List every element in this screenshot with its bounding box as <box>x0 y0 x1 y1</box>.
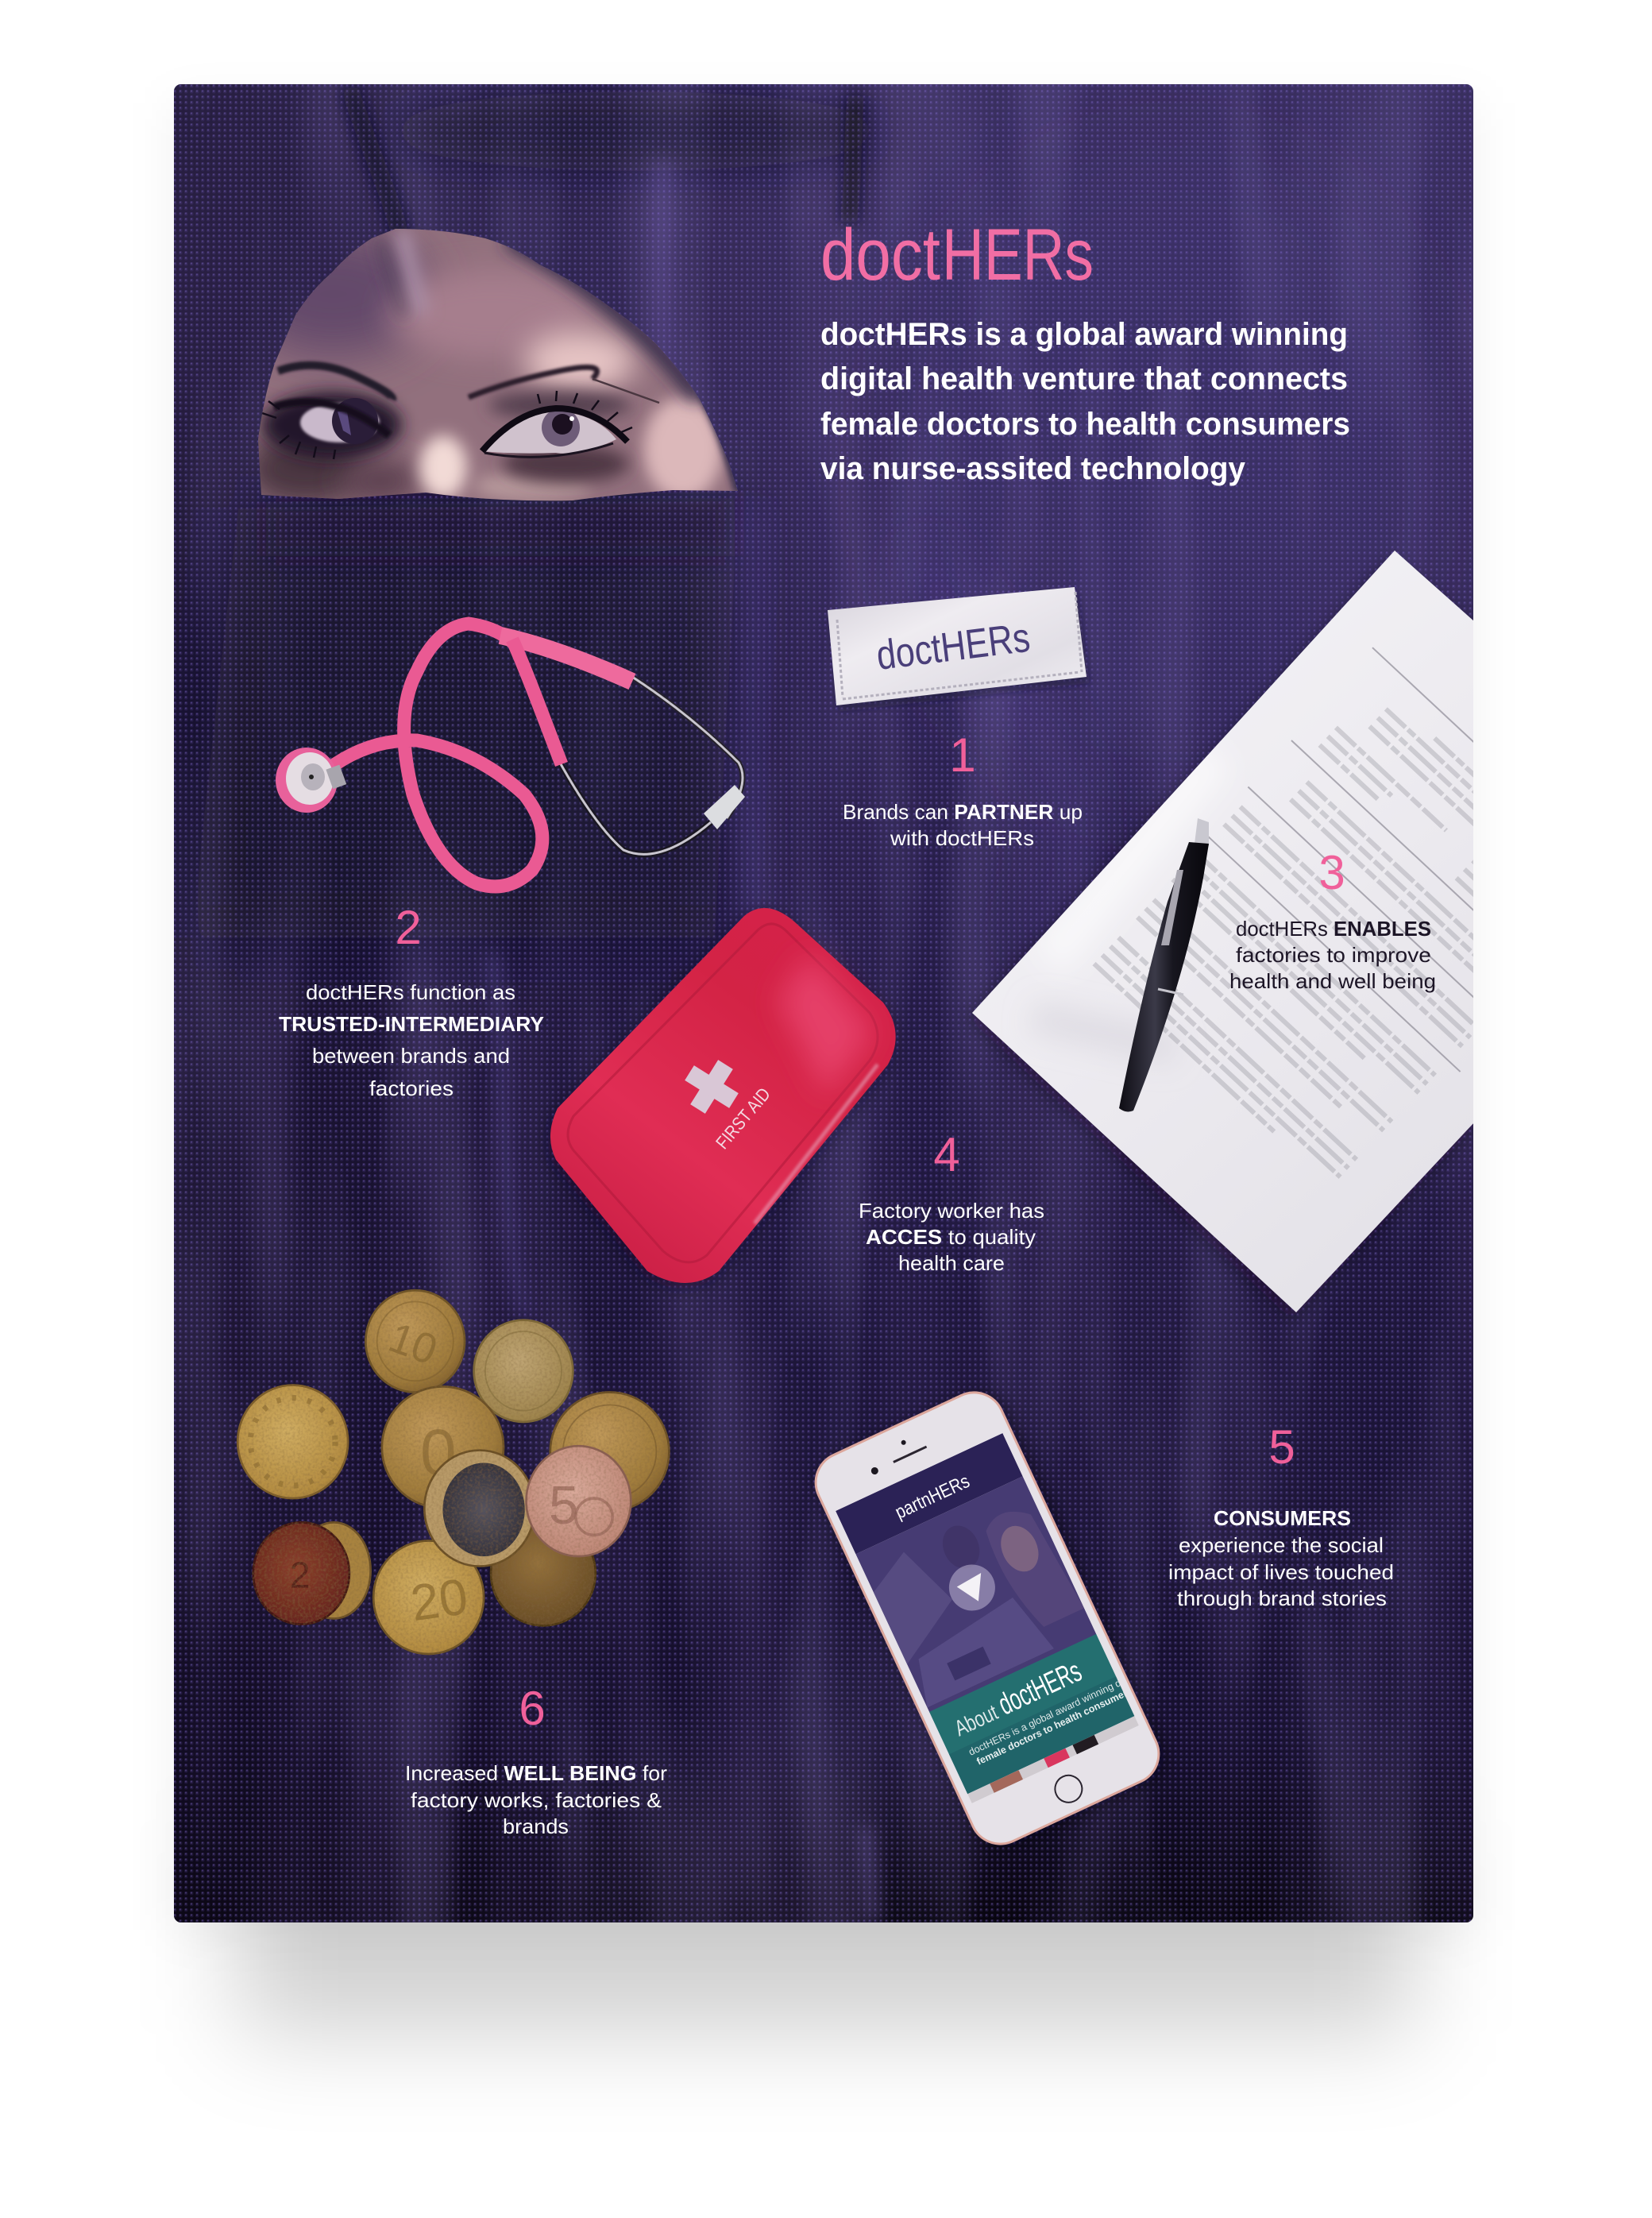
poster drop shadow <box>174 103 1473 2034</box>
intro text <box>820 317 1350 486</box>
step 6 <box>405 1682 667 1838</box>
chest piece <box>276 748 346 813</box>
step 2 <box>279 901 544 1100</box>
right eye <box>469 367 659 483</box>
phone screen text: partnHERs <box>892 1470 973 1524</box>
coin: twenty: 20 <box>407 1567 471 1632</box>
coin: stacked red cents <box>253 1522 371 1625</box>
face in veil opening <box>258 229 738 500</box>
step 3 description <box>1229 917 1436 993</box>
step 3 <box>1229 846 1436 993</box>
coin: dark bottom <box>491 1521 596 1625</box>
play button <box>941 1557 1002 1618</box>
phone screen text: doctHERs is a global award winning digital health <box>967 1656 1168 1758</box>
step 1 <box>843 728 1083 850</box>
coin: large behind <box>550 1393 669 1511</box>
step 2 description: factories <box>369 1076 454 1100</box>
step 4 <box>859 1128 1044 1275</box>
intro text: digital health venture that connects <box>820 361 1348 396</box>
phone screen text: female doctors to health consumers via nurse <box>975 1666 1176 1768</box>
paper printed lines <box>1094 673 1603 1186</box>
step 2 description: doctHERs function as <box>306 980 515 1004</box>
step 6 description: factory works, factories & <box>411 1788 662 1812</box>
coin: centre: 0 <box>420 1416 457 1489</box>
step 1 description: Brands can PARTNER up <box>843 800 1083 824</box>
paper document <box>953 540 1631 1327</box>
step 5 description: impact of lives touched <box>1168 1560 1394 1584</box>
intro text: doctHERs is a global award winning <box>820 317 1348 352</box>
phone screen text: doctHERs <box>994 1655 1087 1721</box>
coin: centre <box>382 1386 504 1509</box>
step 3 description: doctHERs ENABLES <box>1236 917 1431 941</box>
coin: ten cents <box>365 1290 465 1393</box>
coin: five cents <box>527 1446 631 1556</box>
intro text: via nurse-assited technology <box>820 451 1246 486</box>
coins <box>237 1290 669 1654</box>
phone screen text <box>858 1426 1176 1770</box>
step 4 description: Factory worker has <box>859 1199 1044 1223</box>
home button <box>1051 1771 1087 1806</box>
number 1: 1 <box>949 728 976 782</box>
phone screen text: About <box>951 1700 1002 1741</box>
logo: doctHERs: doct <box>820 214 940 296</box>
panel: poster <box>166 84 1481 2075</box>
logo: doctHERs <box>820 214 1094 296</box>
stethoscope <box>276 624 745 887</box>
number 4: 4 <box>933 1128 960 1181</box>
step 6 description <box>405 1761 667 1838</box>
number 6: 6 <box>519 1682 546 1735</box>
number 5: 5 <box>1268 1420 1295 1474</box>
coin: five cents: 5 <box>549 1476 579 1536</box>
first aid kit <box>548 908 896 1289</box>
step 2 description <box>279 980 544 1100</box>
step 1 description <box>843 800 1083 850</box>
step 4 description <box>859 1199 1044 1275</box>
step 5 description: CONSUMERS <box>1214 1506 1351 1530</box>
coin: stacked red cents: 2 <box>290 1554 310 1595</box>
step 5 description: through brand stories <box>1177 1586 1387 1610</box>
step 3 description: factories to improve <box>1236 943 1431 967</box>
phone speaker and camera <box>865 1432 928 1475</box>
coin: ten cents: 10 <box>383 1314 443 1374</box>
phone screen <box>836 1410 1189 1803</box>
pen <box>1119 818 1209 1111</box>
step 5 description <box>1168 1506 1394 1610</box>
logo: doctHERs: HERs <box>942 214 1094 296</box>
number 3: 3 <box>1318 846 1345 899</box>
step 3 description: health and well being <box>1229 969 1436 993</box>
step 2 description: TRUSTED-INTERMEDIARY <box>279 1012 544 1036</box>
step 1 description: with doctHERs <box>890 826 1034 850</box>
fabric background <box>174 84 1473 1922</box>
step 4 description: health care <box>898 1251 1005 1275</box>
step 6 description: Increased WELL BEING for <box>405 1761 667 1785</box>
intro text: female doctors to health consumers <box>820 407 1350 442</box>
step 5 <box>1168 1420 1394 1610</box>
left eye <box>262 365 402 459</box>
smartphone <box>806 1363 1212 1857</box>
first aid text: FIRST AID <box>712 1084 774 1153</box>
coin: light gold <box>474 1320 573 1422</box>
coin: stars <box>237 1385 348 1498</box>
doctHERs fabric label: doctHERs <box>874 615 1032 679</box>
step 2 description: between brands and <box>312 1044 510 1068</box>
step 5 description: experience the social <box>1179 1533 1384 1557</box>
step 6 description: brands <box>503 1814 569 1838</box>
coin: twenty <box>373 1541 484 1654</box>
number 2: 2 <box>395 901 422 954</box>
doctHERs fabric label <box>828 587 1090 712</box>
cross symbol <box>676 1051 747 1123</box>
step 4 description: ACCES to quality <box>866 1225 1036 1249</box>
coin: bimetal euro <box>424 1451 535 1567</box>
